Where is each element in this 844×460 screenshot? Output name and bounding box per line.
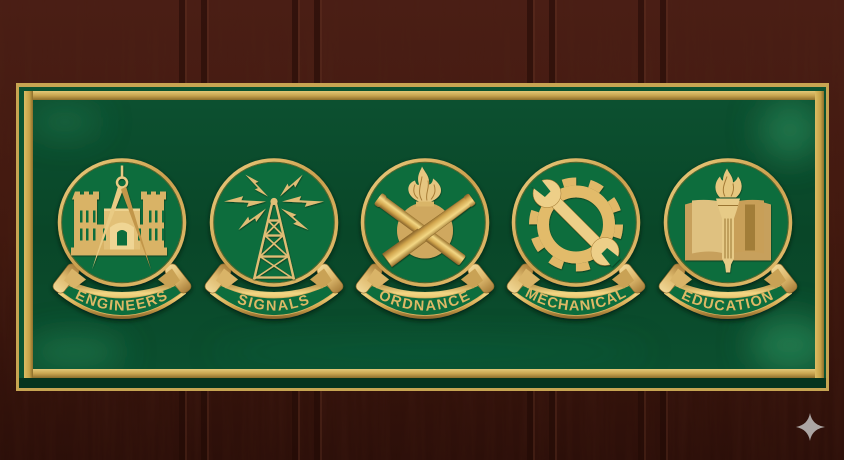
- icon: flaming bomb and crossed cannons: [374, 166, 477, 267]
- icon: gear and wrench: [526, 172, 626, 273]
- icon: castle and compass: [71, 166, 167, 270]
- green velvet panel: [25, 100, 830, 373]
- badge: engineers: [51, 158, 193, 324]
- label: signals: SIGNALS: [238, 294, 309, 311]
- label: ordnance: ORDNANCE: [380, 291, 470, 311]
- badge: education: [657, 158, 799, 324]
- badge: signals: [203, 158, 345, 324]
- label: engineers: ENGINEERS: [75, 290, 167, 311]
- badge: mechanical: [505, 158, 647, 324]
- label: education: EDUCATION: [682, 290, 774, 311]
- label: mechanical: MECHANICAL: [525, 288, 626, 310]
- icon: open book and torch: [685, 168, 771, 272]
- icon: radio tower and lightning: [224, 172, 324, 280]
- badge: ordnance: [354, 158, 496, 324]
- plaque frame: [16, 83, 830, 391]
- icon: sparkle watermark: [796, 413, 825, 441]
